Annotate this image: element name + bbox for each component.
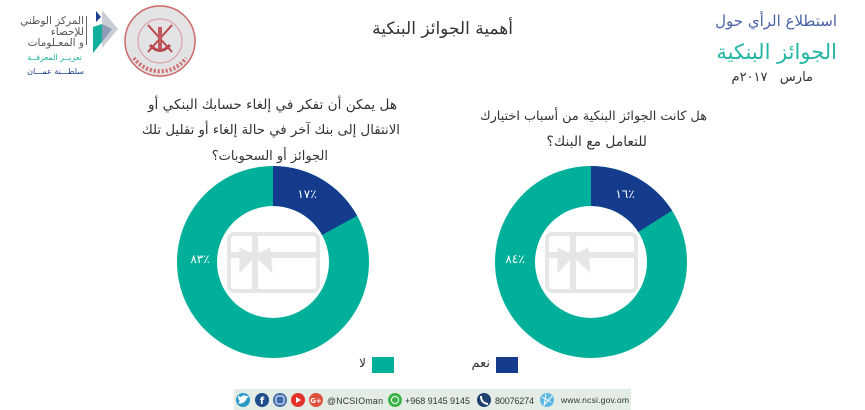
question: left: الانتقال إلى بنك آخر في حالة إلغاء أو تقليل تلك [142, 121, 400, 138]
logo: national centre for statistics and information: سلطـــنة عمـــان [27, 67, 84, 76]
icon: gift card [547, 234, 636, 291]
question: right [480, 107, 707, 150]
report title block: استطلاع الرأي حول [715, 11, 837, 31]
question: left: هل يمكن أن تفكر في إلغاء حسابك البنكي أو [147, 95, 397, 113]
legend: نعم [471, 356, 490, 371]
report title block: مارس ٢٠١٧م [732, 70, 813, 85]
donut chart: right [495, 166, 687, 358]
main heading: أهمية الجوائز البنكية [372, 17, 513, 39]
question: left [142, 95, 400, 164]
logo: national centre for statistics and information: للإحصاء [51, 26, 84, 38]
report title block [715, 11, 837, 85]
footer contact strip: 80076274 [495, 396, 534, 406]
footer contact strip: G+ [310, 397, 322, 405]
donut chart: left [177, 166, 369, 358]
label: 16 percent: ١٦٪ [615, 187, 635, 201]
question: right: هل كانت الجوائز البنكية من أسباب اختيارك [480, 107, 707, 124]
icon: gift card [229, 234, 318, 291]
logo: national centre for statistics and information: المركز الوطني [20, 15, 84, 27]
footer contact strip: www.ncsi.gov.om [560, 395, 629, 405]
legend: لا [359, 356, 366, 370]
footer contact strip [234, 389, 631, 410]
question: right: للتعامل مع البنك؟ [547, 134, 647, 150]
footer contact strip: @NCSIOman [327, 396, 383, 406]
question: left: الجوائز أو السحوبات؟ [212, 147, 328, 164]
footer contact strip: f [260, 396, 265, 407]
footer contact strip: +968 9145 9145 [405, 396, 470, 406]
logo: national centre for statistics and information: تعزيــز المعرفــة [27, 53, 82, 62]
label: 17 percent: ١٧٪ [297, 187, 317, 201]
logo: central bank of oman seal [124, 5, 196, 77]
logo: national centre for statistics and information: و المعـلومات [28, 37, 84, 49]
label: 83 percent: ٨٣٪ [190, 252, 210, 266]
label: 84 percent: ٨٤٪ [505, 252, 525, 266]
logo: national centre for statistics and information [20, 10, 118, 76]
report title block: الجوائز البنكية [716, 40, 837, 64]
legend [359, 356, 518, 373]
